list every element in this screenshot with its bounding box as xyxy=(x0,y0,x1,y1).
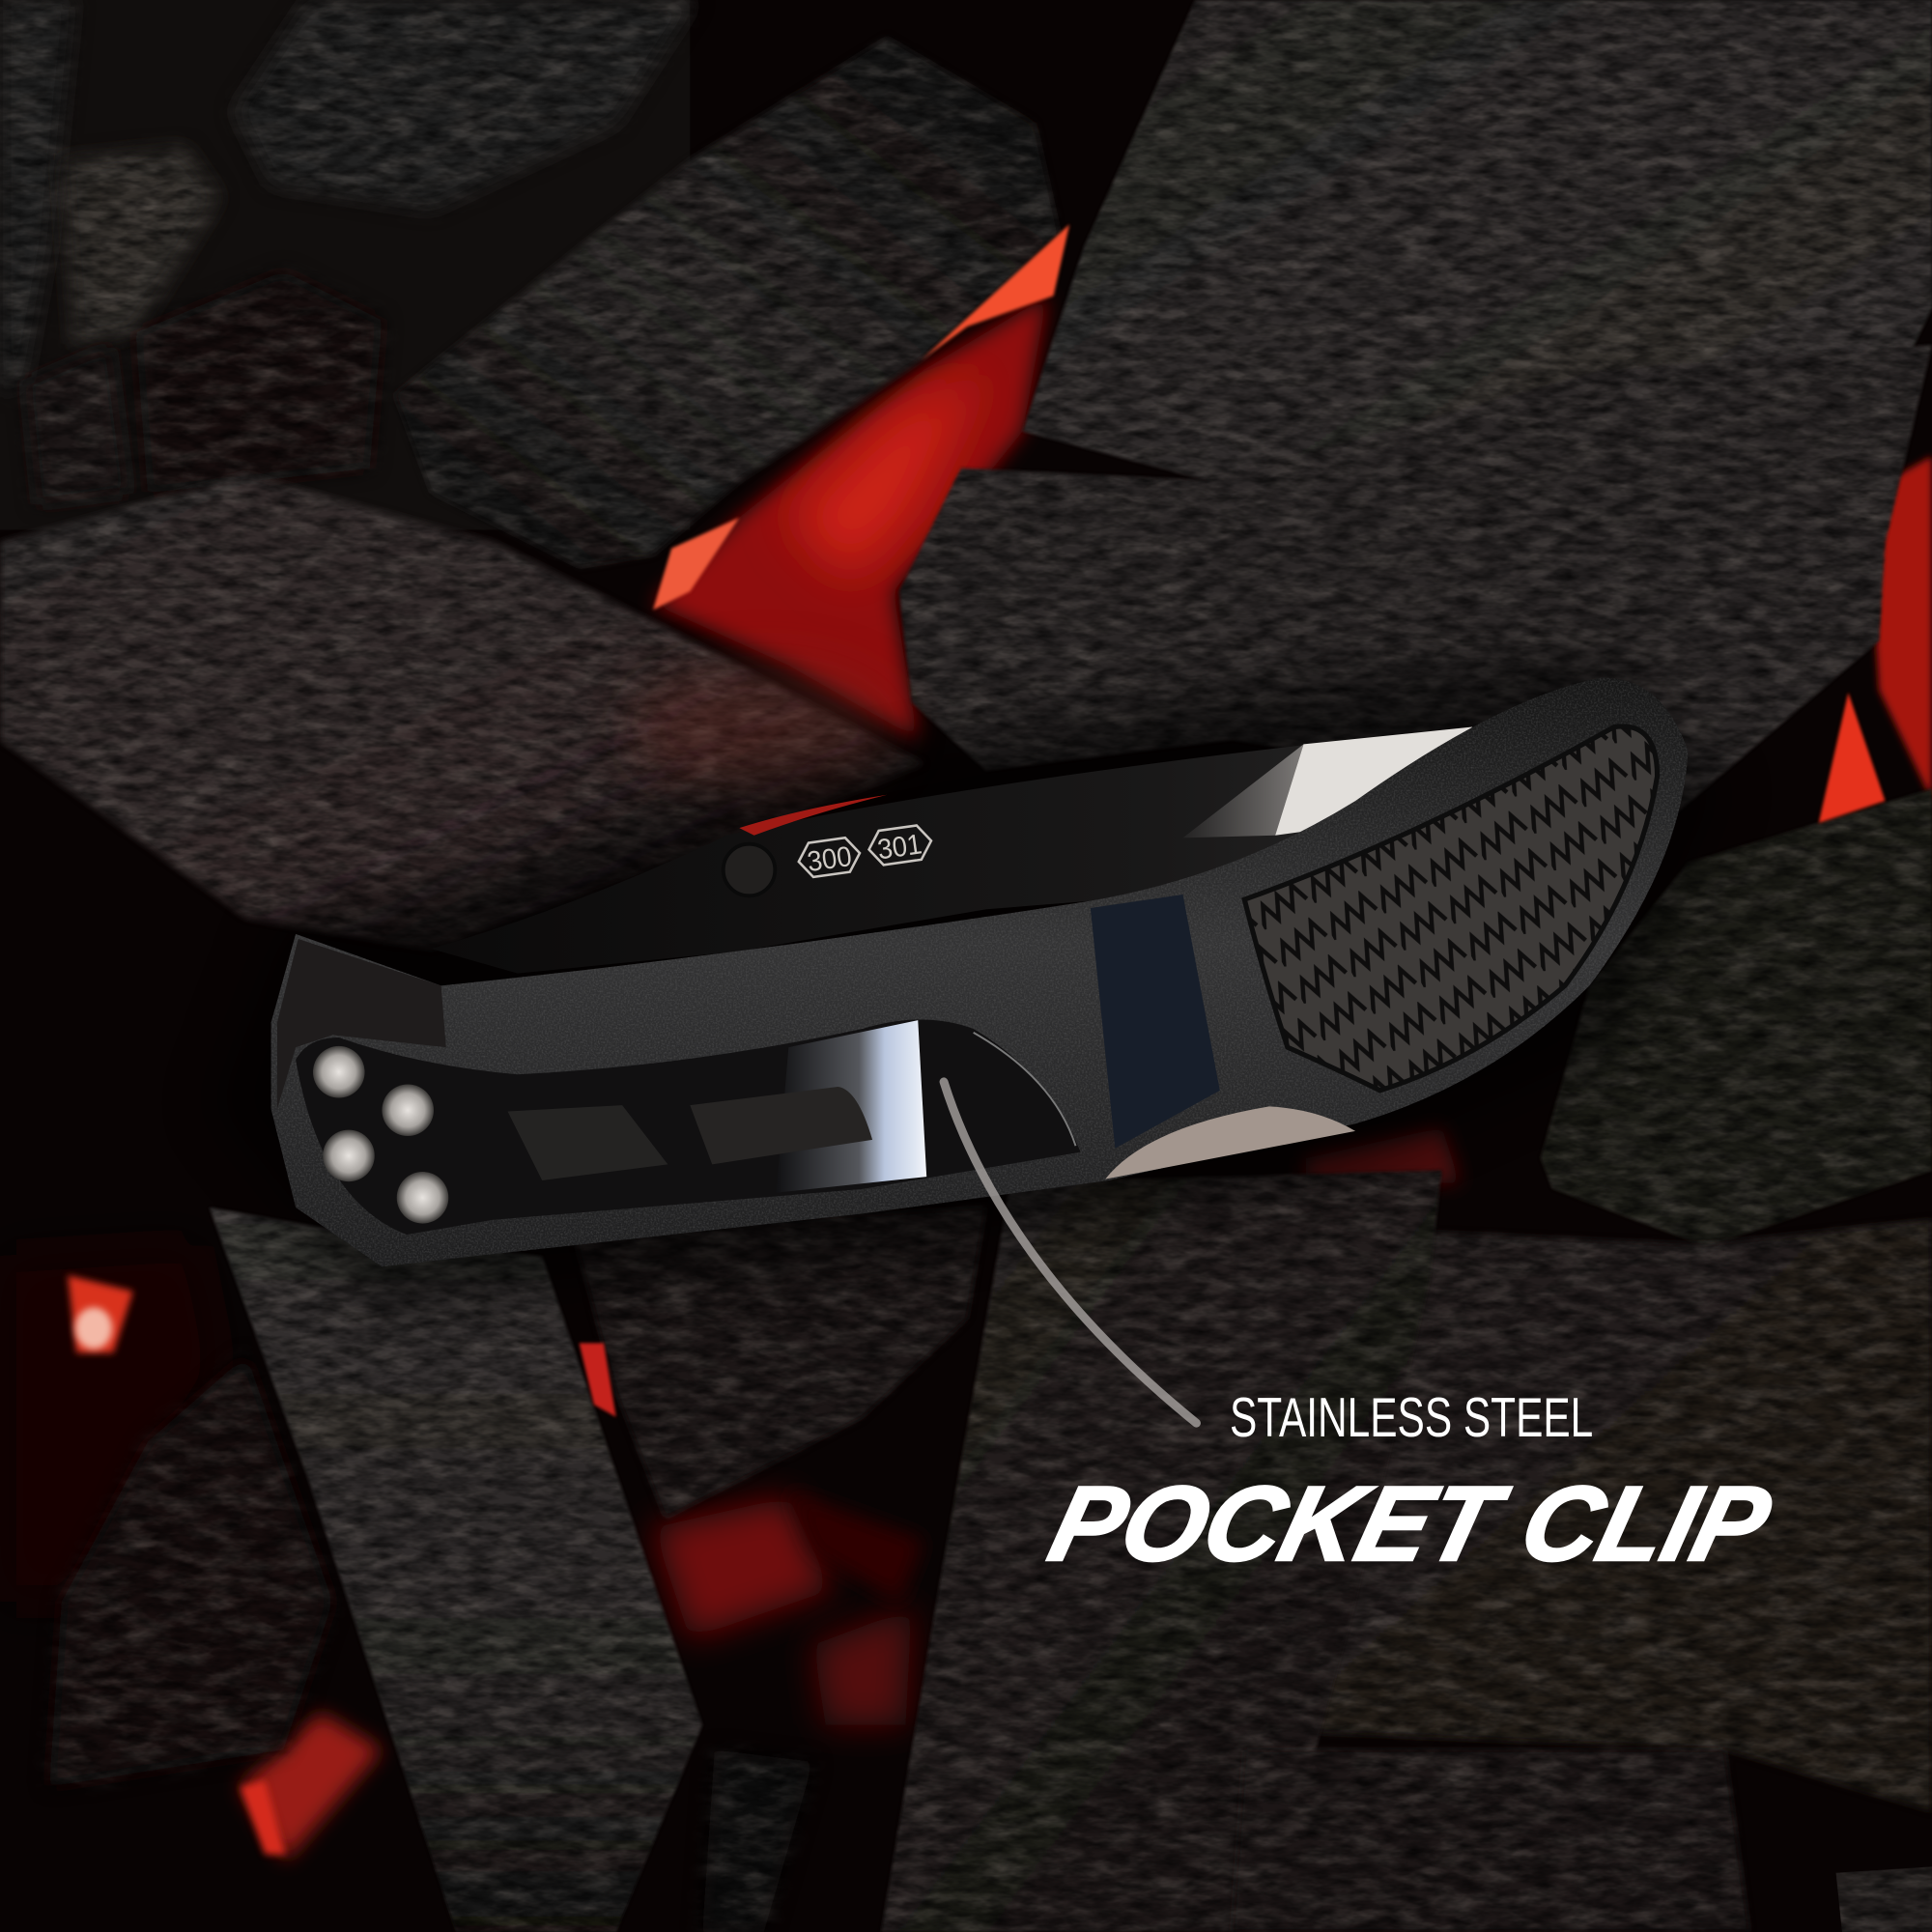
clip cutout left xyxy=(508,1105,668,1180)
knife handle xyxy=(271,678,1688,1266)
screw xyxy=(397,1172,448,1224)
lower blade edge xyxy=(1105,1106,1355,1179)
panel: bright embers xyxy=(68,224,1886,1855)
screw xyxy=(382,1084,434,1136)
clip edge shine xyxy=(974,1033,1076,1146)
warm ember light on left chunk xyxy=(629,659,899,795)
steel badge 300 xyxy=(796,836,863,879)
text: stainless steel: STAINLESS STEEL xyxy=(1230,1387,1593,1449)
clip cutout right xyxy=(690,1087,872,1164)
handle bolster band xyxy=(277,939,446,1109)
arrow: callout leader line xyxy=(944,1082,1197,1423)
blade streak xyxy=(1182,744,1303,838)
callout text xyxy=(1039,1387,1781,1582)
clip highlight xyxy=(777,1020,926,1193)
heading: pocket clip: POCKET CLIP xyxy=(1039,1463,1781,1582)
background haze top left xyxy=(0,0,690,529)
blade red reflection xyxy=(739,795,887,836)
steel badge 300: 300 xyxy=(806,840,854,878)
screw xyxy=(323,1130,375,1181)
stainless steel pocket clip xyxy=(296,1019,1081,1235)
steel badge 301 xyxy=(867,824,934,867)
pivot xyxy=(724,844,775,895)
handle shadow band xyxy=(1091,895,1220,1149)
blade highlight xyxy=(1275,727,1472,836)
panel: folding knife xyxy=(271,678,1688,1266)
screw xyxy=(313,1046,365,1097)
knife blade xyxy=(431,727,1472,974)
textured grip xyxy=(1244,726,1658,1091)
knife shadow xyxy=(210,653,1725,1306)
steel badge 301: 301 xyxy=(875,828,923,866)
